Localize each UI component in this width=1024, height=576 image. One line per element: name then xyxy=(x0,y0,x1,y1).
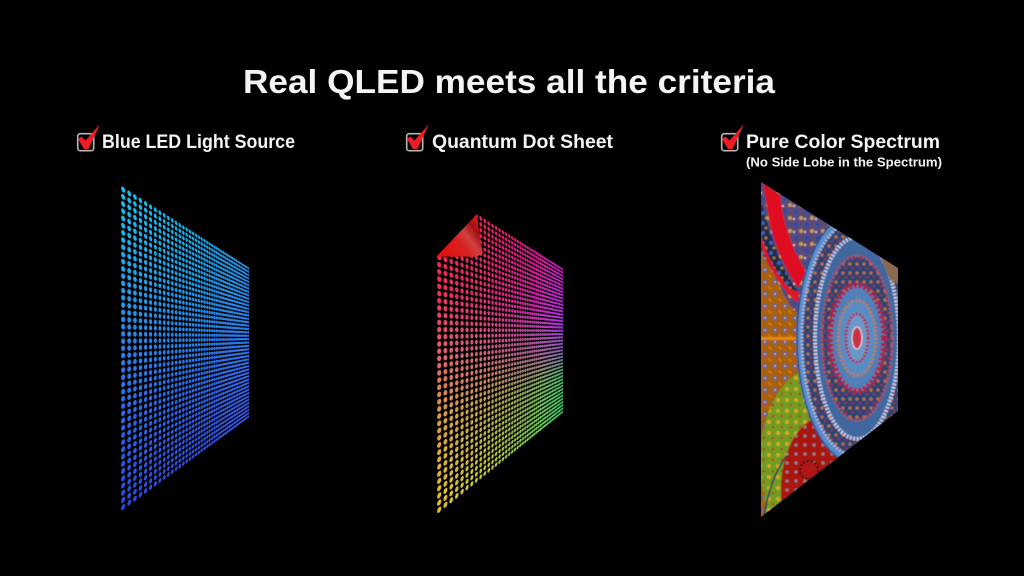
peeled corner of the sheet xyxy=(436,189,483,257)
orange cloth corner at top right xyxy=(880,257,898,285)
lower green plate xyxy=(762,454,787,516)
heading: quantum dot sheet with checkbox: Quantum Dot Sheet xyxy=(432,132,614,153)
panel: blue LED light source xyxy=(76,124,295,510)
heading: blue LED light source with checkbox xyxy=(76,124,295,153)
quantum dot matrix in perspective xyxy=(437,214,563,514)
LED dot matrix in perspective xyxy=(121,186,249,510)
panel: pure color spectrum xyxy=(720,124,942,170)
upper red paisley band xyxy=(763,183,806,288)
red centre of lower plate xyxy=(780,420,838,502)
heading: blue LED light source with checkbox: Blue LED Light Source xyxy=(102,132,295,153)
orange patterned cloth xyxy=(761,224,830,517)
heading: pure color spectrum with checkbox and note: Pure Color Spectrum xyxy=(746,132,940,153)
dark blue fold at the left edge xyxy=(761,197,798,292)
flower on plate xyxy=(800,461,818,479)
heading: quantum dot sheet with checkbox xyxy=(406,124,614,153)
heading: pure color spectrum with checkbox and note xyxy=(720,124,942,170)
upper green plate xyxy=(761,372,812,504)
brown cloth at right edge xyxy=(884,290,900,415)
colourful mural screen in perspective xyxy=(761,182,898,517)
panel: quantum dot sheet xyxy=(406,124,614,514)
title: Real QLED meets all the criteria xyxy=(243,63,776,100)
heading: pure color spectrum with checkbox and note: (No Side Lobe in the Spectrum) xyxy=(746,156,942,170)
purple paisley cloth xyxy=(760,180,830,320)
red accent on right cloth xyxy=(888,360,898,392)
lower red paisley band xyxy=(760,232,799,303)
orange stripe xyxy=(760,337,796,340)
mandala xyxy=(795,224,898,458)
